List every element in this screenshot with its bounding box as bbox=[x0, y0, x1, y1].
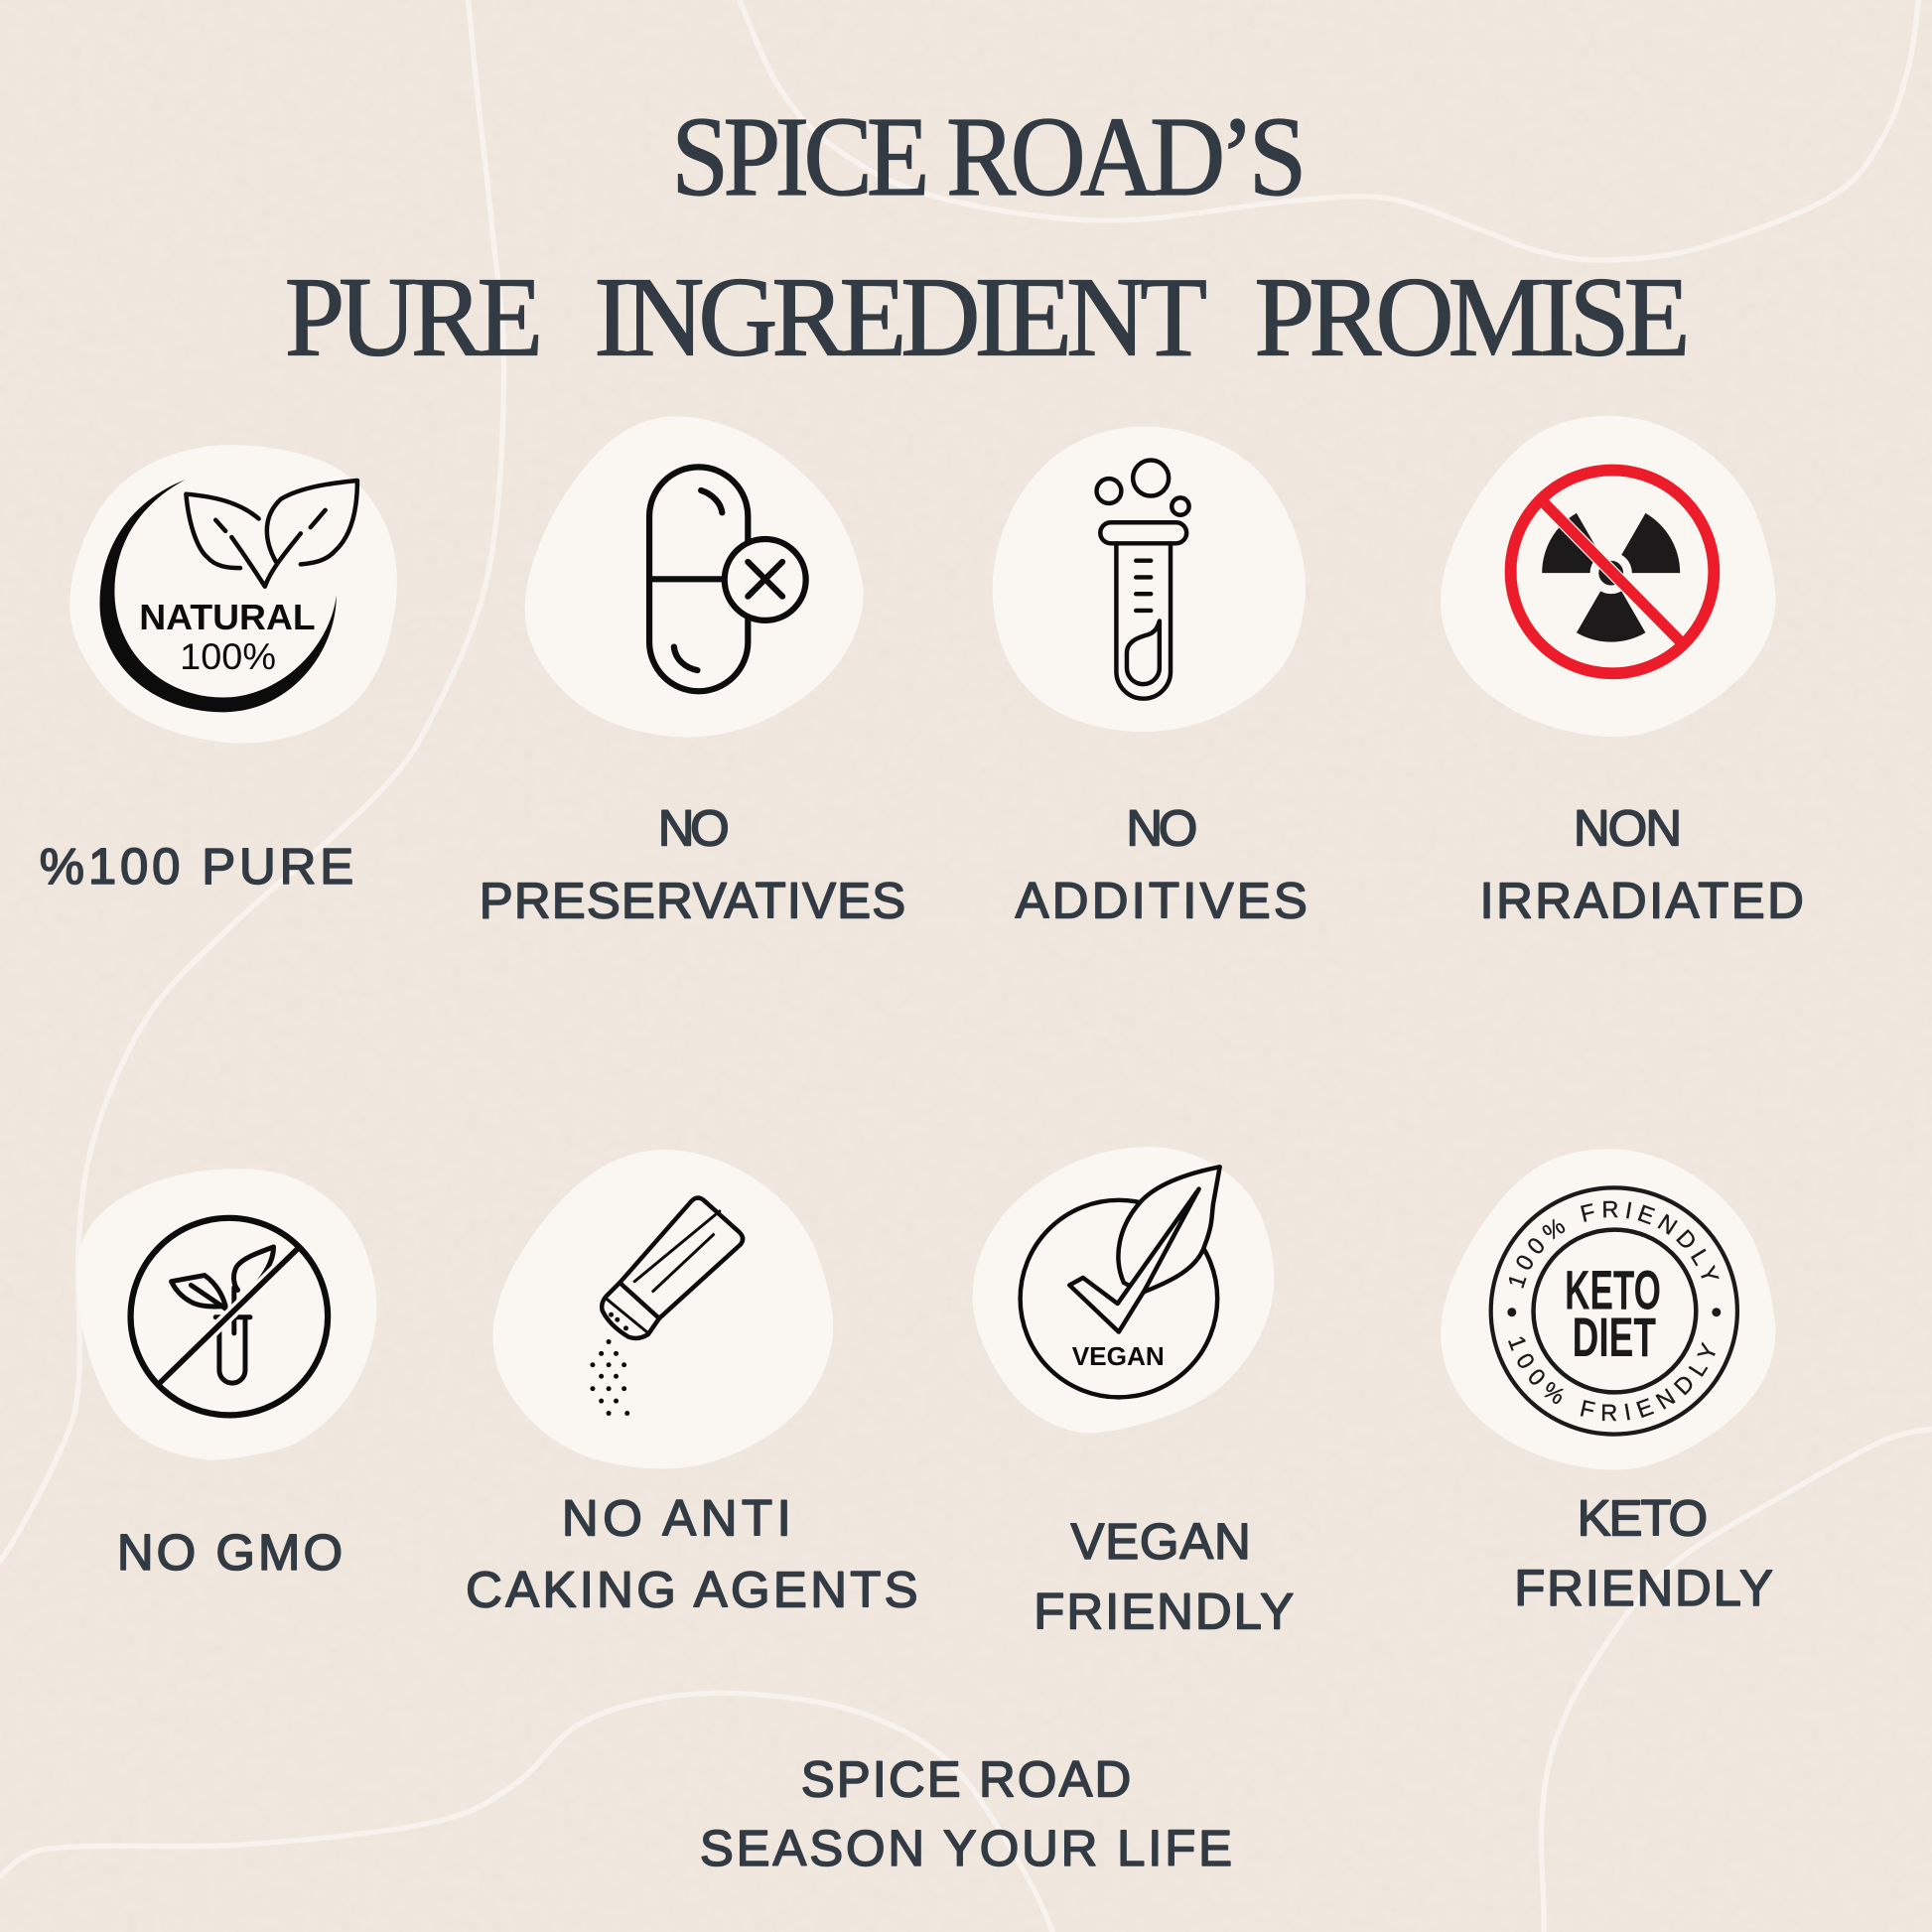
title: SPICE bbox=[671, 93, 925, 219]
title bbox=[285, 93, 1686, 379]
icon: keto diet stamp: KETO bbox=[1565, 1259, 1661, 1321]
icon: natural 100% badge bbox=[100, 480, 357, 712]
label bbox=[466, 1489, 918, 1617]
blob backdrop bbox=[997, 431, 1302, 728]
panel: no preservatives bbox=[480, 421, 905, 929]
blob backdrop bbox=[529, 421, 859, 733]
footer tagline bbox=[700, 1750, 1232, 1876]
footer tagline: SEASON YOUR LIFE bbox=[700, 1820, 1232, 1876]
panel: no anti caking agents bbox=[466, 1154, 918, 1617]
panel: keto friendly bbox=[1441, 1149, 1775, 1616]
blob backdrop bbox=[74, 449, 393, 739]
label: FRIENDLY bbox=[1514, 1560, 1773, 1616]
icon: vegan check leaf: VEGAN bbox=[1072, 1341, 1165, 1371]
label: NO bbox=[658, 799, 730, 856]
title: PURE bbox=[285, 253, 539, 379]
blob backdrop bbox=[81, 1173, 372, 1455]
label: NO bbox=[1126, 799, 1197, 856]
label: PRESERVATIVES bbox=[480, 873, 905, 929]
blob backdrop bbox=[1445, 1154, 1771, 1465]
label: NON bbox=[1574, 799, 1682, 856]
blob backdrop bbox=[497, 1154, 829, 1464]
title: INGREDIENT bbox=[594, 253, 1205, 379]
label: %100 PURE bbox=[40, 838, 353, 895]
label bbox=[1514, 1489, 1773, 1616]
label: CAKING AGENTS bbox=[466, 1561, 918, 1617]
panel: non irradiated bbox=[1445, 420, 1804, 929]
title: PROMISE bbox=[1254, 253, 1686, 379]
blob backdrop bbox=[1445, 420, 1771, 733]
icon: keto diet stamp: 100% FRIENDLY bbox=[1508, 1336, 1716, 1422]
label: NO ANTI bbox=[562, 1489, 791, 1546]
panel: no gmo bbox=[81, 1173, 372, 1581]
icon: keto diet stamp: DIET bbox=[1573, 1306, 1656, 1368]
label: FRIENDLY bbox=[1034, 1584, 1294, 1640]
icon: keto diet stamp bbox=[1489, 1185, 1739, 1437]
icon: vegan check leaf bbox=[1021, 1167, 1220, 1397]
icon: natural 100% badge: 100% bbox=[180, 635, 276, 677]
icon: keto diet stamp: 100% FRIENDLY bbox=[1509, 1201, 1720, 1289]
panel: no additives bbox=[997, 431, 1308, 929]
label: KETO bbox=[1578, 1489, 1708, 1546]
label: ADDITIVES bbox=[1016, 873, 1308, 929]
icon: no gmo plant bbox=[131, 1218, 328, 1415]
label bbox=[1480, 799, 1804, 929]
icon: natural 100% badge: NATURAL bbox=[139, 597, 316, 637]
blob backdrop bbox=[977, 1151, 1270, 1429]
label: NO GMO bbox=[117, 1524, 343, 1581]
footer tagline: SPICE ROAD bbox=[801, 1750, 1131, 1807]
icon: capsule with x bbox=[649, 467, 806, 691]
label: IRRADIATED bbox=[1480, 873, 1804, 929]
icon: no radiation bbox=[1511, 470, 1714, 673]
label bbox=[1034, 1513, 1294, 1640]
label bbox=[1016, 799, 1308, 929]
panel: 100% pure bbox=[40, 449, 393, 895]
label bbox=[480, 799, 905, 929]
icon: test tube bbox=[1097, 461, 1189, 699]
panel: vegan friendly bbox=[977, 1151, 1294, 1640]
title: ROAD’S bbox=[946, 93, 1302, 219]
icon: salt shaker bbox=[590, 1198, 743, 1416]
label: VEGAN bbox=[1070, 1513, 1251, 1570]
